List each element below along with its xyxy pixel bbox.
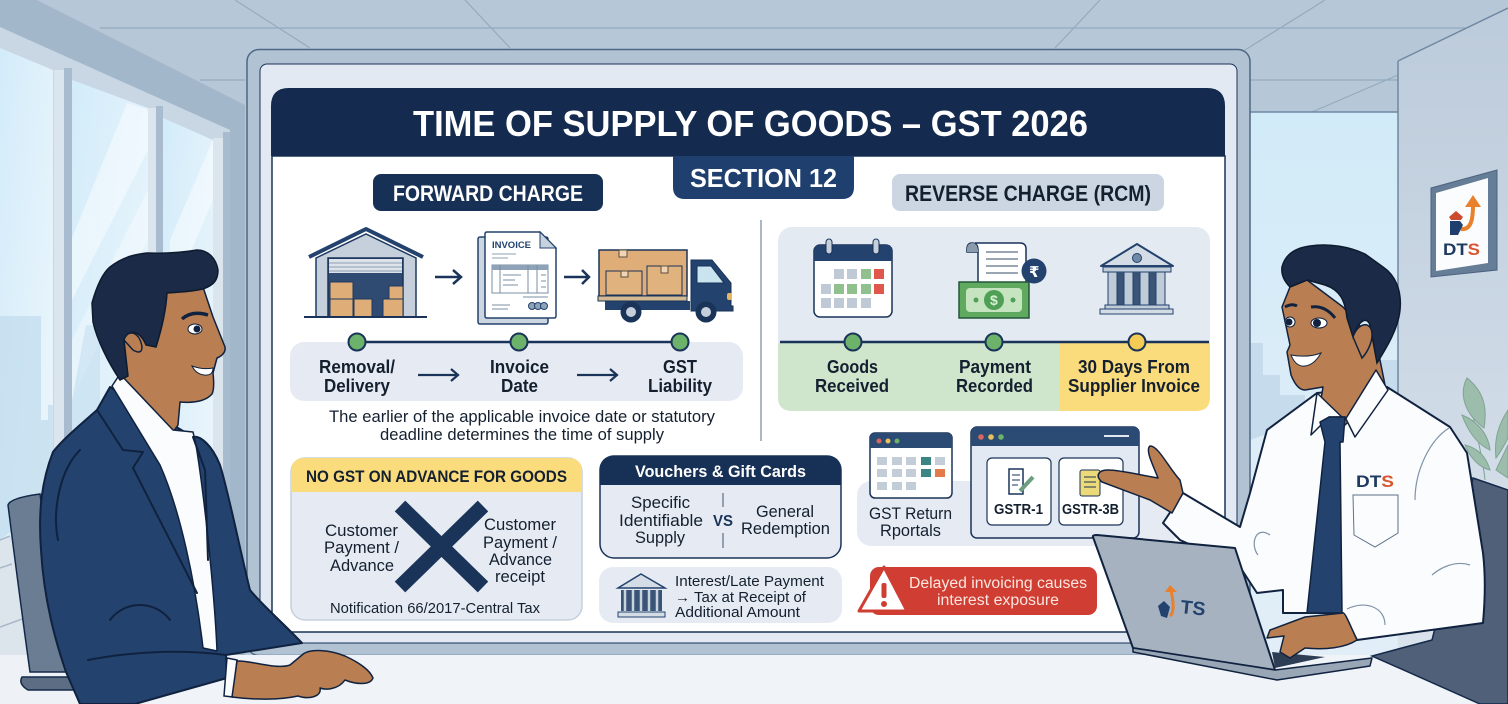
suit jacket	[40, 387, 302, 704]
panel: reverse charge timeline: Supplier Invoice	[1068, 376, 1200, 396]
arrow	[564, 270, 589, 284]
forward charge explanation	[329, 408, 716, 444]
icon: warehouse	[304, 229, 427, 317]
title banner	[271, 88, 1225, 156]
laptop logo: TS	[1179, 597, 1207, 621]
white shirt	[1163, 387, 1485, 640]
ear	[124, 333, 142, 352]
panel: no GST on advance: Advance	[489, 550, 552, 569]
panel: interest and late payment: → Tax at Receipt of	[675, 590, 807, 606]
forward charge heading	[373, 174, 603, 211]
panel: reverse charge timeline: Recorded	[956, 376, 1033, 396]
panel: vouchers and gift cards: Redemption	[741, 520, 830, 538]
title banner: TIME OF SUPPLY OF GOODS – GST 2026	[413, 103, 1088, 144]
icon: calendar	[814, 239, 892, 317]
shirt folds	[1254, 428, 1470, 625]
panel: GST return portals: Rportals	[880, 522, 941, 540]
section tab: SECTION 12	[690, 163, 837, 193]
panel: GSTR portal window: GSTR-1	[994, 502, 1043, 518]
icon: payment receipt and cash: ₹	[1029, 263, 1039, 281]
forward charge timeline: Liability	[648, 376, 712, 396]
shirt cuff	[224, 658, 237, 697]
panel: interest and late payment: Interest/Late Payment	[675, 574, 824, 590]
open pointing hand	[1098, 446, 1183, 513]
panel: reverse charge timeline: Goods	[827, 357, 878, 377]
icon: payment receipt and cash	[959, 243, 1046, 318]
laptop keyboard base	[1133, 648, 1372, 680]
eye and smile	[182, 313, 213, 375]
panel: vouchers and gift cards: Specific	[631, 494, 690, 512]
reverse charge heading: REVERSE CHARGE (RCM)	[905, 181, 1151, 206]
panel: no GST on advance: Advance	[330, 556, 394, 575]
callout: delayed invoicing warning: interest exposure	[937, 592, 1059, 609]
hand on keyboard	[1267, 613, 1357, 658]
forward charge explanation: The earlier of the applicable invoice date or statutory	[329, 408, 716, 426]
shirt logo: DTS	[1356, 473, 1394, 491]
panel: no GST on advance: Customer	[325, 521, 398, 540]
panel: vouchers and gift cards: VS	[713, 513, 733, 530]
panel: GST return portals	[857, 433, 1177, 546]
panel: no GST on advance: Payment /	[483, 533, 557, 552]
callout: delayed invoicing warning	[859, 567, 1097, 615]
panel: no GST on advance: Payment /	[324, 538, 399, 557]
hair	[92, 250, 218, 380]
white shirt collar and front	[112, 374, 217, 651]
hair	[1282, 245, 1400, 363]
panel: reverse charge timeline	[778, 227, 1210, 411]
plant	[1462, 378, 1508, 480]
forward charge timeline: Invoice	[490, 357, 549, 377]
panel: GSTR portal window: GSTR-3B	[1062, 502, 1119, 518]
panel: no GST on advance: Notification 66/2017-Central Tax	[330, 601, 541, 617]
icon: delivery truck	[598, 250, 733, 322]
laptop lid	[1093, 535, 1275, 670]
panel: GSTR portal window	[971, 427, 1139, 538]
panel: no GST on advance: NO GST ON ADVANCE FOR GOODS	[306, 468, 567, 486]
jacket lapels and seams	[56, 410, 226, 660]
panel: no GST on advance: receipt	[495, 567, 545, 586]
reverse charge heading	[892, 174, 1164, 211]
icon: invoice document: INVOICE	[492, 240, 531, 251]
panel: vouchers and gift cards	[600, 456, 841, 558]
callout: delayed invoicing warning: Delayed invoicing causes	[909, 575, 1087, 592]
panel: interest and late payment: Additional Amount	[675, 605, 800, 621]
forward charge heading: FORWARD CHARGE	[393, 181, 583, 206]
ear	[1353, 325, 1372, 358]
neck and face	[120, 287, 225, 432]
neck and face	[1282, 280, 1385, 425]
panel: interest and late payment	[599, 567, 842, 623]
icon: payment receipt and cash: $	[990, 292, 998, 308]
collar	[1311, 370, 1388, 437]
icon: bank building	[1100, 244, 1173, 314]
panel: GST return portals: GST Return	[869, 505, 952, 523]
section tab	[673, 156, 854, 199]
shirt pocket	[1353, 495, 1398, 547]
panel: reverse charge timeline: Payment	[959, 357, 1031, 377]
icon: invoice document	[478, 232, 556, 324]
forward charge timeline: Date	[501, 376, 538, 396]
laptop logo	[1158, 585, 1207, 621]
panel: reverse charge timeline: 30 Days From	[1078, 357, 1190, 377]
forward charge explanation: deadline determines the time of supply	[380, 426, 665, 444]
panel: vouchers and gift cards: Vouchers & Gift Cards	[635, 462, 806, 481]
panel: vouchers and gift cards: Identifiable	[619, 512, 703, 530]
display board frame	[247, 50, 1250, 656]
forward charge timeline: Delivery	[324, 376, 390, 396]
panel: no GST on advance: Customer	[484, 515, 556, 534]
left person in navy suit	[8, 250, 373, 704]
panel: no GST on advance	[291, 458, 582, 620]
forward charge timeline: GST	[663, 357, 697, 377]
forward charge timeline: Removal/	[319, 357, 395, 377]
eyes and smile	[1285, 305, 1335, 366]
wall frame with DTS logo	[1431, 170, 1497, 277]
panel: vouchers and gift cards: General	[756, 503, 814, 521]
panel: vouchers and gift cards: Supply	[635, 529, 686, 547]
forward charge timeline	[290, 334, 743, 401]
left office chair	[8, 494, 120, 690]
wall frame with DTS logo: DTS	[1443, 240, 1480, 259]
desk	[110, 655, 1508, 704]
arrow	[435, 270, 461, 284]
right office chair	[1372, 478, 1508, 704]
tie	[1307, 417, 1345, 613]
panel: reverse charge timeline: Received	[815, 376, 889, 396]
hands on desk	[232, 651, 373, 699]
right person in white shirt	[1093, 245, 1508, 704]
